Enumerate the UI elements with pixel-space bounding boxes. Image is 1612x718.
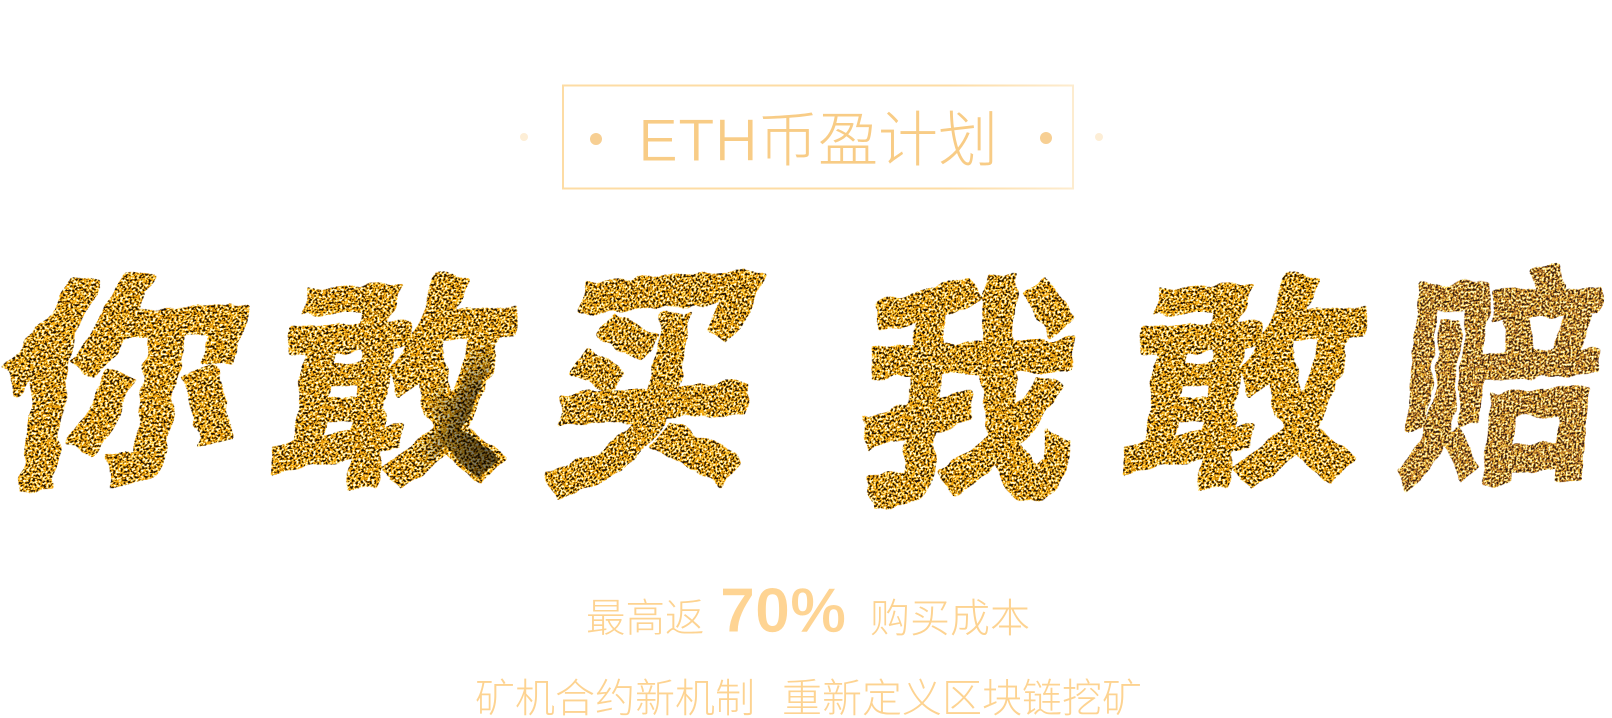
badge left outer dot xyxy=(520,133,528,141)
rebate label: 最高返 xyxy=(586,597,704,641)
badge: ETH plan title xyxy=(520,86,1103,188)
badge frame xyxy=(563,86,1073,188)
headline: gold glitter calligraphy slogan xyxy=(0,184,1612,556)
subtitle: rebate line xyxy=(586,576,1030,646)
rebate tail label: 购买成本 xyxy=(870,597,1030,641)
headline character 5: 敢 xyxy=(1111,200,1384,538)
badge right outer dot xyxy=(1095,133,1103,141)
headline character 4: 我 xyxy=(845,197,1095,556)
headline character 2: 敢 xyxy=(259,199,535,537)
badge title text: ETH币盈计划 xyxy=(638,107,998,174)
badge right inner dot xyxy=(1040,132,1052,144)
headline character 3: 买 xyxy=(532,184,784,546)
rebate figure: 70% xyxy=(720,576,846,646)
badge left inner dot xyxy=(590,133,602,145)
